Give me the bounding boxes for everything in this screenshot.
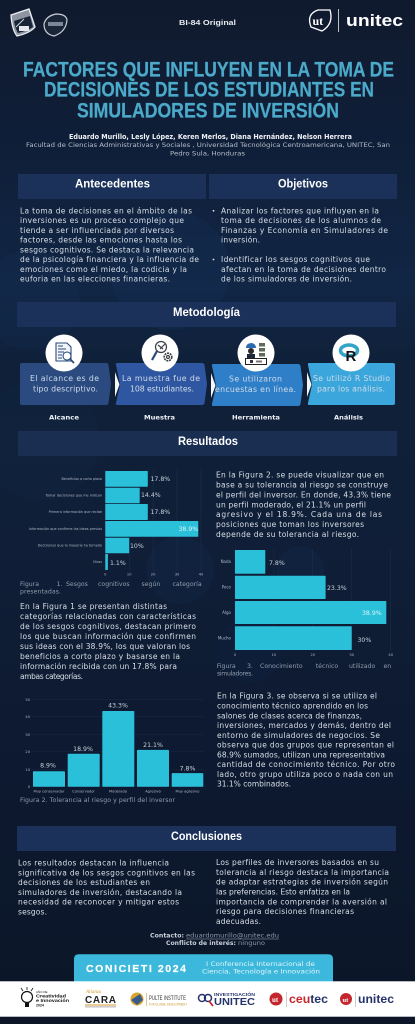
text: analisis figura 1: de los sesgos cognitivos, destacan primero bbox=[20, 622, 196, 631]
step: Herramienta: encuestas en línea. bbox=[215, 385, 296, 394]
chart: figura 2 tolerancia al riesgo: Muy agresivo bbox=[176, 790, 199, 794]
caption figura 3: Figura bbox=[217, 663, 236, 670]
logo: creatividad: 2024 bbox=[36, 1004, 44, 1008]
title: SIMULADORES DE INVERSIÓN bbox=[77, 98, 339, 122]
heading: Metodología bbox=[17, 302, 396, 327]
text: analisis figura 2: agresivo y el 18.9%. Cada una de las bbox=[216, 510, 382, 519]
heading: Conclusiones bbox=[17, 826, 396, 851]
chart: figura 2 tolerancia al riesgo: 10 bbox=[25, 768, 31, 772]
contact: Conflicto de interés: bbox=[166, 940, 236, 947]
chart: figura 1 sesgos cognitivos: Decisiones que la mayoría ha tomado bbox=[38, 544, 102, 548]
step: Alcance: El alcance es de bbox=[30, 374, 99, 383]
bars figura 2 bbox=[33, 711, 203, 787]
chart: figura 1 sesgos cognitivos: Información que confirme las ideas previas bbox=[29, 527, 102, 531]
conference banner: Ciencia, Tecnología e Innovación bbox=[202, 968, 320, 976]
text: objetivos: Finanzas y Economía en Simuladores de bbox=[221, 226, 388, 235]
logo: CARA: CARA bbox=[85, 995, 116, 1006]
logo: creatividad bbox=[21, 987, 69, 1008]
step: Muestra bbox=[116, 334, 207, 422]
text: conclusion derecha: riesgo para decisiones financieras bbox=[216, 907, 354, 916]
chart: figura 2 tolerancia al riesgo: 40 bbox=[25, 715, 31, 719]
chart: figura 1 sesgos cognitivos: 17.8% bbox=[150, 509, 170, 516]
text: antecedentes: emociones como el miedo, la codicia y la bbox=[20, 265, 187, 274]
white chevron bbox=[211, 373, 216, 398]
text: conclusion derecha: importancia de comprender la aversión al bbox=[216, 897, 387, 906]
chart: figura 1 sesgos cognitivos: 20 bbox=[151, 572, 156, 576]
text: objetivos bbox=[213, 206, 388, 284]
conference banner: CONICIETI 2024 bbox=[86, 963, 186, 975]
chart: figura 3 conocimiento tecnico: 30% bbox=[358, 637, 371, 644]
text: conclusion derecha: Los perfiles de inversores basados en su bbox=[216, 858, 379, 867]
chart: figura 3 conocimiento tecnico: 10 bbox=[272, 653, 277, 657]
text: conclusion izquierda: necesidad de reconocer y mitigar estos bbox=[18, 898, 179, 907]
step: Muestra: Muestra bbox=[144, 414, 175, 422]
chart: figura 1 sesgos cognitivos: 10 bbox=[127, 572, 132, 576]
chart: figura 3 conocimiento tecnico: 30 bbox=[349, 653, 355, 657]
caption figura 3: Conocimiento bbox=[260, 663, 303, 670]
step: Análisis: Se utilizó R Studio bbox=[313, 374, 390, 383]
text: conclusion izquierda: decisiones de los estudiantes en bbox=[18, 878, 150, 887]
logo: Pulte Institute: FOR GLOBAL DEVELOPMENT bbox=[149, 1002, 187, 1006]
text: analisis figura 2 bbox=[216, 471, 391, 539]
caption figura 1: cognitivos bbox=[98, 581, 130, 588]
text: antecedentes: La toma de decisiones en el ámbito de las bbox=[20, 206, 192, 215]
heading: Conclusiones: Conclusiones bbox=[171, 831, 242, 843]
text: analisis figura 1: información recibida con un 17.8% para bbox=[20, 662, 177, 671]
chart: figura 3 conocimiento tecnico: 38.9% bbox=[362, 610, 382, 617]
chart: figura 2 tolerancia al riesgo: 43.3% bbox=[108, 702, 128, 710]
text: analisis figura 1: sus ideas con el 38.9%, los que valoran los bbox=[20, 642, 190, 651]
step: Muestra: La muestra fue de bbox=[122, 374, 200, 383]
heading: Resultados: Resultados bbox=[178, 436, 238, 448]
step: Análisis bbox=[308, 334, 395, 422]
icon: person with checklist bbox=[246, 343, 266, 364]
text: antecedentes: inversiones es un proceso complejo que bbox=[20, 216, 184, 225]
bars figura 1 bbox=[105, 471, 198, 570]
conference banner bbox=[74, 954, 333, 982]
chart: figura 2 tolerancia al riesgo: Muy conservador bbox=[34, 790, 65, 794]
text: antecedentes: de la psicología financiera y la influencia de bbox=[20, 255, 199, 264]
text: analisis figura 3 bbox=[217, 692, 395, 789]
sponsor logos strip bbox=[0, 981, 415, 1017]
icon: R logo: R bbox=[346, 348, 356, 365]
text: objetivos: de los simuladores de inversión. bbox=[221, 275, 352, 284]
logo: Investigacion Unitec bbox=[198, 990, 256, 1008]
caption figura 1: Figura bbox=[20, 581, 39, 588]
text: antecedentes: sesgos cognitivos. Se destaca la relevancia bbox=[20, 245, 194, 254]
logo: creatividad: AÑO DE bbox=[36, 989, 48, 994]
text: objetivos: Analizar los factores que influyen en la bbox=[221, 206, 379, 215]
caption figura 3: simuladores. bbox=[217, 670, 253, 677]
chart: figura 3 conocimiento tecnico: Poco bbox=[222, 584, 232, 590]
text: analisis figura 2: el perfil del inversor. En donde, 43.3% tiene bbox=[216, 490, 391, 499]
chart: figura 2 tolerancia al riesgo: 20 bbox=[25, 750, 31, 754]
chart: figura 2 tolerancia al riesgo: Moderado bbox=[109, 790, 127, 794]
text: objetivos: toma de decisiones de los alumnos de bbox=[221, 216, 381, 225]
chart: figura 3 conocimiento tecnico: 20 bbox=[311, 653, 316, 657]
caption figura 3: utilizado bbox=[349, 663, 375, 670]
text: analisis figura 3: 31.1% combinados. bbox=[217, 780, 291, 789]
text: objetivos: Identificar los sesgos cognitivos que bbox=[221, 255, 370, 264]
chart: figura 1 sesgos cognitivos: 14.4% bbox=[141, 492, 161, 499]
text: analisis figura 1: beneficios a corto plazo y basarse en la bbox=[20, 652, 180, 661]
unitec logo: unitec bbox=[346, 11, 403, 30]
unitec logo: ut bbox=[312, 14, 323, 28]
heading: Objetivos bbox=[209, 174, 397, 199]
text: conclusion izquierda: Los resultados destacan la influencia bbox=[18, 859, 169, 868]
logo: unitec: ut bbox=[342, 997, 349, 1004]
chart: figura 3 conocimiento tecnico: 40 bbox=[388, 653, 394, 657]
text: analisis figura 3: salones de clases acerca de finanzas, bbox=[217, 711, 362, 720]
chart: figura 3 conocimiento tecnico: Mucho bbox=[218, 636, 232, 640]
caption figura 3: en bbox=[384, 663, 391, 670]
heading: Resultados bbox=[18, 431, 397, 456]
contact: eduardomurillo@unitec.edu bbox=[186, 933, 279, 940]
step: Alcance: Alcance bbox=[49, 414, 80, 422]
caption figura 1: según bbox=[142, 580, 160, 588]
logo: ceutec: ut bbox=[272, 996, 279, 1004]
text: analisis figura 1: ambas categorías. bbox=[20, 672, 83, 681]
chart: figura 3 conocimiento tecnico: Nada bbox=[221, 559, 232, 564]
logo: creatividad: e Innovación bbox=[36, 998, 69, 1004]
step: Análisis: para los análisis. bbox=[317, 385, 385, 394]
text: conclusion derecha bbox=[216, 858, 389, 926]
chart: figura 2 tolerancia al riesgo: Conservador bbox=[72, 790, 95, 794]
step: Herramienta: Se utilizaron bbox=[229, 374, 282, 384]
heading: Antecedentes bbox=[18, 174, 206, 199]
caption figura 1 bbox=[20, 580, 202, 595]
text: analisis figura 2: depende de su tolerancia al riesgo. bbox=[216, 530, 359, 539]
caption figura 1: categoría bbox=[172, 580, 202, 588]
text: analisis figura 2: base a su tolerancia al riesgo se construye bbox=[216, 480, 388, 490]
step: Muestra: 108 estudiantes. bbox=[130, 385, 194, 394]
chart: figura 2 tolerancia al riesgo: Agresivo bbox=[145, 790, 161, 794]
text: analisis figura 3: observa que dos grupos que representan el bbox=[217, 741, 394, 750]
logo: Investigacion Unitec: INVESTIGACIÓN bbox=[214, 990, 256, 997]
title bbox=[23, 58, 394, 122]
text: antecedentes bbox=[20, 206, 199, 284]
text: conclusion derecha: tolerancia al riesgo destaca la importancia bbox=[216, 868, 389, 877]
logo: creatividad: Creatividad bbox=[36, 994, 66, 1000]
affiliation bbox=[26, 141, 390, 157]
logo: Pulte Institute bbox=[130, 992, 187, 1006]
contact: ninguno bbox=[238, 940, 265, 947]
contact: Contacto: bbox=[150, 933, 184, 940]
chart: figura 3 conocimiento tecnico: 7.8% bbox=[269, 560, 285, 567]
chart: figura 1 sesgos cognitivos: Beneficios a corto plazo bbox=[61, 477, 102, 481]
chart: figura 3 conocimiento tecnico: 23.3% bbox=[327, 585, 347, 592]
text: analisis figura 1: En la Figura 1 se presentan distintas bbox=[20, 602, 167, 611]
chart: figura 1 sesgos cognitivos: 17.8% bbox=[150, 476, 170, 483]
step: Análisis: Análisis bbox=[334, 414, 363, 422]
icon: magnifier and gear bbox=[152, 342, 172, 361]
logo: CARA: Alianza bbox=[85, 990, 102, 995]
white chevron bbox=[307, 372, 312, 397]
caption figura 1: Sesgos bbox=[66, 581, 88, 588]
logo: ceutec: ceutec bbox=[289, 992, 328, 1006]
chart: figura 1 sesgos cognitivos bbox=[29, 470, 204, 576]
logo: unitec bbox=[340, 992, 395, 1007]
chart: figura 2 tolerancia al riesgo: 21.1% bbox=[143, 742, 163, 749]
contact bbox=[150, 933, 279, 947]
logo: ceutec bbox=[270, 992, 328, 1007]
logo: unitec: unitec bbox=[358, 994, 395, 1006]
chart: figura 1 sesgos cognitivos: 1.1% bbox=[110, 560, 126, 567]
caption figura 3: 3. bbox=[247, 663, 253, 670]
text: analisis figura 1 bbox=[20, 602, 196, 681]
authors: Eduardo Murillo, Lesly López, Keren Merlos, Diana Hernández, Nelson Herrera bbox=[69, 133, 352, 141]
chart: figura 3 conocimiento tecnico bbox=[218, 549, 394, 657]
caption figura 2: Figura 2. Tolerancia al riesgo y perfil del inversor bbox=[20, 797, 175, 804]
text: conclusion derecha: de adaptar estrategias de inversión según bbox=[216, 878, 388, 887]
caption figura 3: técnico bbox=[316, 662, 338, 670]
chart: figura 1 sesgos cognitivos: 10% bbox=[130, 543, 144, 550]
chart: figura 2 tolerancia al riesgo: 50 bbox=[25, 698, 31, 702]
text: antecedentes: factores, desde las emociones hasta los bbox=[20, 236, 182, 245]
heading: Antecedentes: Antecedentes bbox=[75, 179, 150, 191]
caption figura 1: presentadas. bbox=[20, 588, 61, 595]
text: conclusion izquierda: simuladores de inversión, destacando la bbox=[18, 888, 182, 897]
step: Alcance bbox=[20, 334, 111, 422]
chart: figura 2 tolerancia al riesgo: 0 bbox=[28, 785, 31, 789]
chart: figura 1 sesgos cognitivos: 38.9% bbox=[178, 526, 198, 533]
text: analisis figura 1: los que buscan información que confirmen bbox=[20, 632, 196, 641]
text: analisis figura 3: inversiones, mercados y demás, dentro del bbox=[217, 721, 391, 730]
heading: Metodología: Metodología bbox=[173, 307, 241, 319]
header logos: event badges bbox=[11, 9, 67, 36]
text: conclusion izquierda: sesgos. bbox=[18, 907, 47, 916]
caption figura 1: 1. bbox=[56, 581, 62, 588]
text: objetivos: afectan en la toma de decisiones dentro bbox=[221, 265, 386, 274]
chart: figura 1 sesgos cognitivos: 40 bbox=[199, 572, 204, 576]
chart: figura 2 tolerancia al riesgo: 30 bbox=[25, 733, 31, 737]
text: antecedentes: euforia en las elecciones financieras. bbox=[20, 275, 170, 284]
heading: Objetivos: Objetivos bbox=[278, 179, 328, 191]
bars figura 3 bbox=[235, 550, 386, 650]
logo: CARA bbox=[85, 990, 116, 1007]
chart: figura 2 tolerancia al riesgo: 8.9% bbox=[40, 762, 56, 770]
conference banner: I Conferencia Internacional de bbox=[206, 960, 315, 968]
text: analisis figura 3: lado, otro grupo utiliza poco o nada con un bbox=[217, 770, 393, 779]
text: analisis figura 2: un perfil moderado, el 21.1% un perfil bbox=[216, 500, 366, 509]
text: analisis figura 2: posiciones que toman los inversores bbox=[216, 520, 364, 529]
chart: figura 2 tolerancia al riesgo: 18.9% bbox=[73, 746, 93, 753]
affiliation: Pedro Sula, Honduras bbox=[170, 149, 246, 157]
text: analisis figura 3: cantidad de conocimiento técnico. Por otro bbox=[217, 760, 395, 769]
chart: figura 1 sesgos cognitivos: Otros bbox=[93, 560, 102, 564]
step: Alcance: tipo descriptivo. bbox=[33, 385, 98, 394]
chart: figura 1 sesgos cognitivos: 0 bbox=[104, 572, 107, 576]
icon: document with magnifier bbox=[56, 343, 74, 363]
step: Herramienta bbox=[212, 334, 303, 422]
text: conclusion izquierda bbox=[18, 859, 195, 916]
text: analisis figura 3: 68.9% sumados, utilizan una representativa bbox=[217, 750, 385, 759]
text: antecedentes: tiende a ser influenciada por diversos bbox=[20, 226, 174, 235]
unitec logo bbox=[310, 9, 403, 32]
white chevron bbox=[115, 372, 120, 397]
chart: figura 2 tolerancia al riesgo: 7.8% bbox=[180, 766, 195, 772]
chart: figura 1 sesgos cognitivos: Primera información que recibe bbox=[49, 510, 102, 514]
text: conclusion derecha: adecuadas. bbox=[216, 917, 261, 926]
chart: figura 3 conocimiento tecnico: Algo bbox=[222, 610, 232, 615]
text: objetivos: inversión. bbox=[221, 236, 260, 245]
text: analisis figura 2: En la Figura 2. se puede visualizar que en bbox=[216, 471, 384, 480]
text: analisis figura 3: entorno de simuladores de negocios. Se bbox=[217, 731, 380, 740]
logo: Investigacion Unitec: UNITEC bbox=[214, 996, 255, 1008]
text: conclusion izquierda: significativa de los sesgos cognitivos en las bbox=[18, 868, 195, 877]
caption figura 3 bbox=[217, 662, 391, 677]
text: analisis figura 3: conocimiento técnico aprendido en los bbox=[217, 702, 368, 710]
text: conclusion derecha: las preferencias. Esto enfatiza en la bbox=[216, 888, 350, 896]
chart: figura 3 conocimiento tecnico: 0 bbox=[234, 653, 237, 657]
poster code: BI-84 Original bbox=[179, 18, 236, 27]
step: Herramienta: Herramienta bbox=[232, 414, 280, 422]
affiliation: Facultad de Ciencias Administrativas y Sociales , Universidad Tecnológica Centroamericana, UNITEC, San bbox=[26, 141, 390, 149]
chart: figura 2 tolerancia al riesgo bbox=[25, 698, 204, 794]
logo: Pulte Institute: PULTE INSTITUTE bbox=[149, 995, 186, 1002]
chart: figura 1 sesgos cognitivos: Tomar decisiones que me indican bbox=[44, 494, 102, 498]
text: analisis figura 1: categorías relacionadas con características bbox=[20, 612, 196, 621]
chart: figura 1 sesgos cognitivos: 30 bbox=[175, 572, 180, 576]
text: analisis figura 3: En la Figura 3. se observa si se utiliza el bbox=[217, 692, 377, 701]
